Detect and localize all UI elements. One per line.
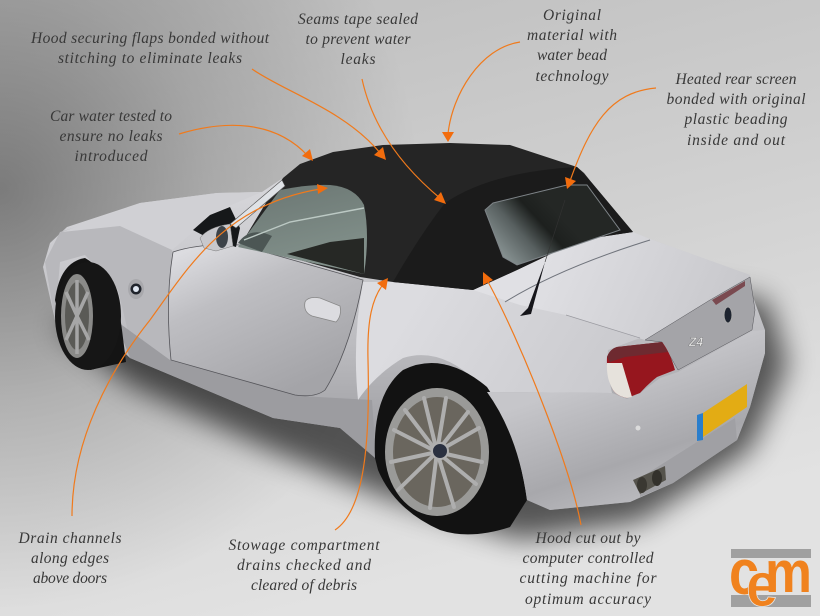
windscreen dark edge bbox=[193, 207, 240, 247]
arrow: seams tape sealed bbox=[362, 79, 446, 204]
text: hood securing flaps: stitching to eliminate leaks bbox=[58, 50, 242, 67]
text: stowage compartment: Stowage compartment bbox=[228, 537, 380, 554]
text: hood cut out bbox=[520, 530, 657, 608]
boot rear shut line bbox=[566, 315, 640, 338]
text: car water tested bbox=[50, 108, 172, 165]
car body bbox=[43, 178, 765, 510]
hood seam panel bbox=[393, 167, 633, 290]
arrow: car water tested bbox=[179, 125, 313, 161]
side window bbox=[238, 185, 367, 274]
text: seams tape sealed: to prevent water bbox=[306, 31, 411, 48]
text: heated rear screen: plastic beading bbox=[684, 111, 788, 128]
arrow: stowage compartment bbox=[335, 278, 388, 530]
text: hood cut out: cutting machine for bbox=[520, 570, 657, 587]
rear wheel bbox=[385, 388, 489, 516]
text: heated rear screen: inside and out bbox=[687, 132, 786, 149]
Z4 badge: Z4 bbox=[688, 335, 703, 349]
text: drain channels: Drain channels bbox=[18, 530, 122, 547]
text: hood securing flaps bbox=[30, 30, 270, 67]
text: original material: technology bbox=[536, 68, 609, 85]
door panel bbox=[168, 245, 363, 396]
text: car water tested: Car water tested to bbox=[50, 108, 172, 125]
boot lid bbox=[473, 232, 750, 340]
logo: cem: m bbox=[765, 540, 812, 605]
text: hood cut out: Hood cut out by bbox=[534, 530, 641, 547]
text: original material: material with bbox=[527, 27, 617, 44]
text: seams tape sealed: Seams tape sealed bbox=[298, 11, 418, 28]
text: heated rear screen: bonded with original bbox=[666, 91, 806, 108]
lower sill bbox=[115, 320, 376, 458]
exhaust pipes bbox=[633, 466, 666, 494]
boot shut line bbox=[505, 240, 650, 302]
front wing shading bbox=[45, 207, 172, 358]
tail light bbox=[607, 342, 675, 398]
windscreen frame bbox=[230, 180, 285, 228]
arrow: drain channels bbox=[72, 184, 328, 516]
car shadow bbox=[55, 285, 788, 540]
logo: cem bbox=[729, 536, 812, 616]
text: original material: Original bbox=[543, 7, 601, 24]
rear bumper bbox=[487, 330, 765, 510]
boot rear face bbox=[645, 277, 755, 370]
parking sensor bbox=[636, 426, 640, 430]
arrow: hood securing flaps bbox=[252, 69, 386, 160]
text: drain channels: above doors bbox=[33, 570, 107, 587]
text: heated rear screen: Heated rear screen bbox=[674, 71, 797, 88]
text: hood securing flaps: Hood securing flaps bonded without bbox=[30, 30, 270, 47]
text: stowage compartment: cleared of debris bbox=[251, 577, 357, 594]
arrow: heated rear screen bbox=[565, 88, 656, 189]
logo: cem: c bbox=[729, 536, 759, 608]
rear wheel arch and tyre bbox=[375, 363, 527, 534]
text: heated rear screen bbox=[666, 71, 806, 149]
text: car water tested: introduced bbox=[74, 148, 148, 165]
front wheel bbox=[55, 262, 121, 370]
text: stowage compartment: drains checked and bbox=[237, 557, 371, 574]
rear badge bbox=[724, 307, 732, 323]
front wheel arch bbox=[55, 258, 126, 370]
text: hood cut out: computer controlled bbox=[522, 550, 654, 567]
arrow: original material bbox=[442, 42, 520, 142]
text: drain channels bbox=[18, 530, 122, 587]
text: car water tested: ensure no leaks bbox=[60, 128, 162, 145]
door handle bbox=[305, 298, 340, 322]
text: original material bbox=[527, 7, 617, 85]
rear window bbox=[485, 185, 620, 265]
text: hood cut out: optimum accuracy bbox=[525, 591, 651, 608]
text: seams tape sealed bbox=[298, 11, 418, 68]
radio antenna bbox=[520, 200, 565, 316]
number plate bbox=[697, 384, 747, 441]
text: original material: water bead bbox=[537, 47, 607, 64]
front badge bbox=[128, 279, 144, 299]
bonnet bbox=[62, 192, 262, 250]
text: stowage compartment bbox=[228, 537, 380, 594]
text: drain channels: along edges bbox=[31, 550, 109, 567]
car photo: silver roadster bbox=[43, 143, 765, 534]
soft top hood bbox=[240, 143, 633, 290]
wing mirror bbox=[200, 224, 233, 251]
bumper lower darker band bbox=[640, 418, 737, 497]
rear quarter panel bbox=[356, 282, 640, 400]
boot spoiler light bbox=[712, 281, 745, 305]
text: seams tape sealed: leaks bbox=[340, 51, 376, 68]
arrow: hood cut out bbox=[483, 272, 581, 525]
